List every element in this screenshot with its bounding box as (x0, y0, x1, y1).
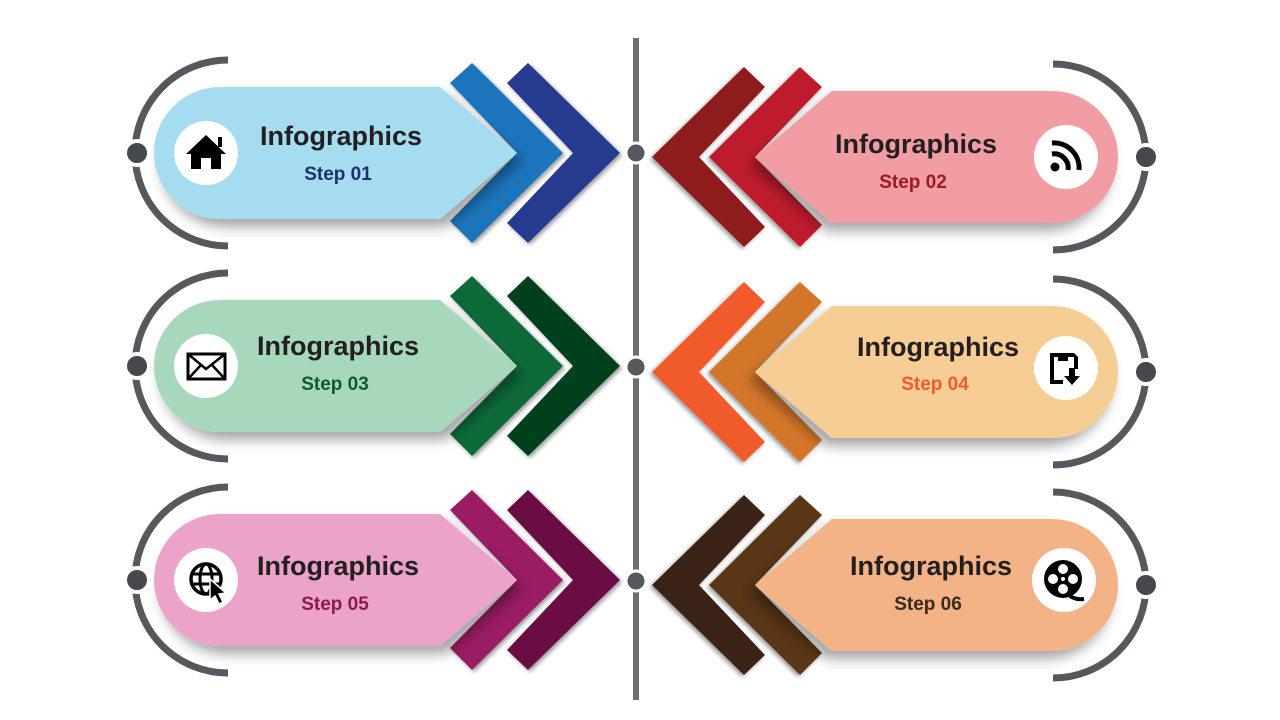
text 01: Infographics (260, 121, 422, 151)
panel: step 04 (652, 279, 1158, 465)
text 04 (857, 332, 1019, 395)
chevrons 04 (652, 282, 822, 462)
text 02: Step 02 (879, 172, 947, 193)
text 05: Step 05 (301, 594, 369, 615)
text 06: Infographics (850, 551, 1012, 581)
pill 02 (755, 91, 1118, 223)
text 06: Step 06 (894, 594, 962, 615)
icon: globe cursor (174, 548, 238, 612)
chevrons 03 (450, 276, 620, 456)
pill 06 (755, 519, 1118, 651)
text 02 (835, 129, 997, 193)
chevrons 01 (450, 63, 620, 243)
text 03: Step 03 (301, 374, 369, 395)
text 05: Infographics (257, 551, 419, 581)
pill 03 (154, 300, 517, 432)
text 03: Infographics (257, 331, 419, 361)
panel: step 05 (125, 487, 620, 673)
icon: home (174, 121, 238, 185)
panel: step 03 (125, 273, 620, 459)
panel: step 02 (652, 64, 1158, 250)
panel: step 06 (652, 492, 1158, 678)
text 01 (260, 121, 422, 185)
text 01: Step 01 (304, 164, 372, 185)
icon: film reel (1032, 548, 1096, 612)
panel: step 01 (125, 60, 620, 246)
chevrons 05 (450, 490, 620, 670)
center line (633, 38, 639, 700)
arc left 5 (125, 487, 228, 673)
arc right 2 (1053, 64, 1158, 250)
arc left 1 (125, 60, 228, 246)
arc left 3 (125, 273, 228, 459)
icon: mail (174, 334, 238, 398)
icon: rss (1034, 125, 1098, 189)
icon: save download (1034, 336, 1098, 400)
chevrons 02 (652, 67, 822, 247)
arc right 6 (1053, 492, 1158, 678)
arc right 4 (1053, 279, 1158, 465)
pill 04 (755, 306, 1118, 438)
text 03 (257, 331, 419, 395)
text 02: Infographics (835, 129, 997, 159)
text 05 (257, 551, 419, 615)
text 04: Infographics (857, 332, 1019, 362)
text 04: Step 04 (901, 374, 969, 395)
pill 05 (154, 514, 517, 646)
pill 01 (154, 87, 517, 219)
chevrons 06 (652, 495, 822, 675)
text 06 (850, 551, 1012, 615)
center dots (626, 143, 646, 591)
